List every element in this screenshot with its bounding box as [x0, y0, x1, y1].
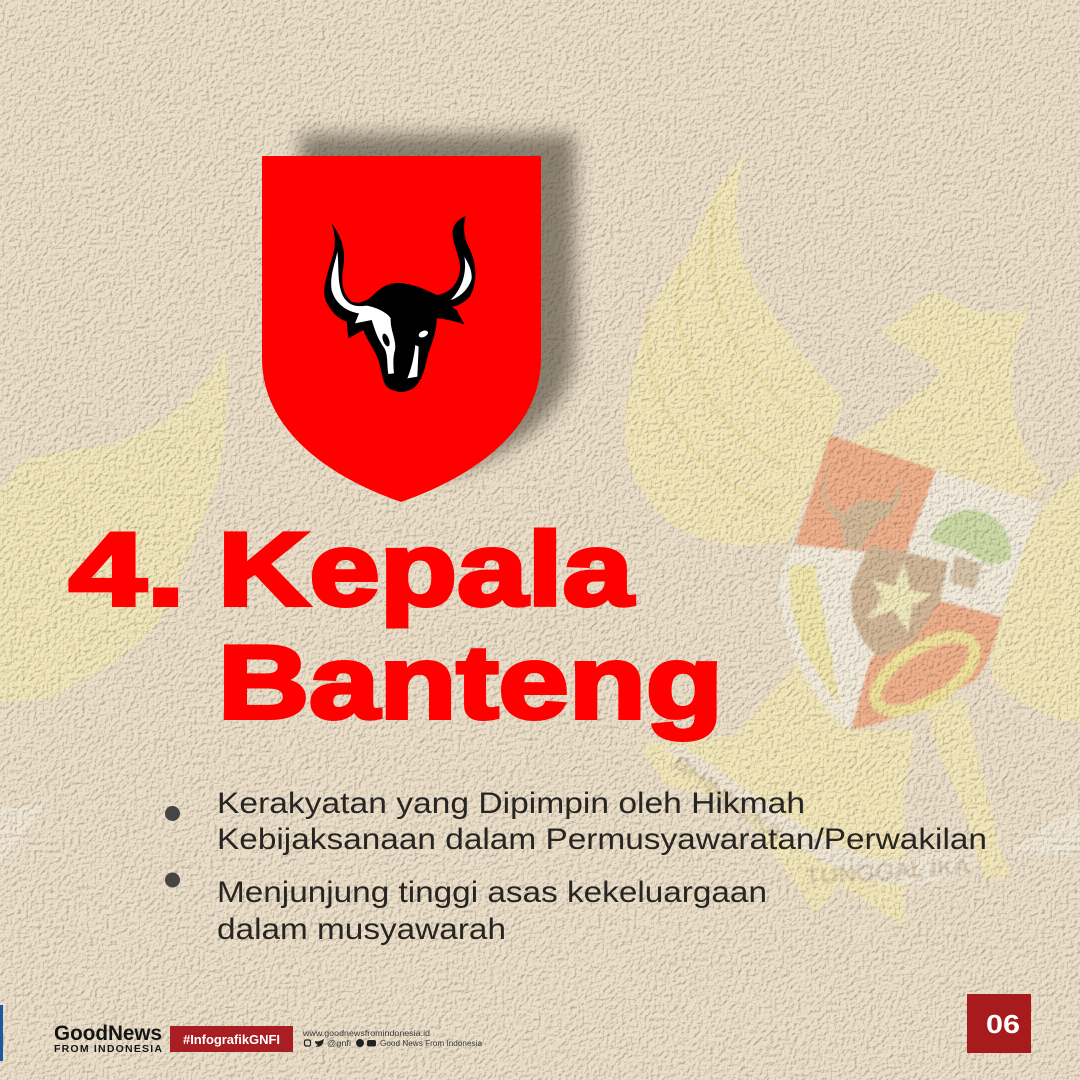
logo GoodNews: GoodNews [54, 1022, 162, 1045]
page name: Good News From Indonesia [380, 1038, 482, 1048]
hashtag badge [170, 1026, 293, 1052]
icon: twitter [315, 1039, 324, 1047]
red quarter top left [795, 435, 936, 555]
footer logo [54, 1022, 162, 1055]
logo subtitle: FROM INDONESIA [54, 1043, 162, 1055]
garuda motto ribbon [664, 745, 978, 884]
garuda tail [640, 660, 915, 927]
title [69, 512, 723, 741]
feather line 1 [711, 200, 800, 420]
bull head black silhouette [324, 216, 475, 392]
shield on garuda [780, 435, 1040, 730]
padi and kapas branch [789, 565, 840, 705]
ribbon end right [1010, 808, 1080, 854]
background emblem: garuda right [625, 153, 1080, 927]
centre brown shield [851, 545, 948, 658]
yellow oval on red quarter [864, 622, 986, 726]
feather line 2 [678, 262, 790, 470]
icon: instagram [304, 1040, 310, 1046]
bullet 2 text line 2: dalam musyawarah [217, 913, 506, 946]
red quarter bottom right [851, 600, 1002, 730]
right horn highlight [451, 257, 472, 300]
bullet 1 text line 2: Kebijaksanaan dalam Permusyawaratan/Perwakilan [217, 823, 987, 856]
centre star [866, 562, 932, 632]
faint bull head [823, 470, 902, 550]
bull eye right [418, 329, 429, 339]
icon: bull head [324, 216, 475, 392]
handle: @gnfi [327, 1038, 351, 1048]
title line 1: Kepala [218, 512, 634, 628]
website: www.goodnewsfromindonesia.id [302, 1028, 430, 1038]
bull nose highlight [407, 345, 419, 378]
title line 2: Banteng [218, 625, 723, 741]
bullet 1 text line 1: Kerakyatan yang Dipimpin oleh Hikmah [217, 787, 805, 820]
bullet 2 text line 1: Menjunjung tinggi asas kekeluargaan [217, 876, 767, 909]
bullet 2 [165, 872, 180, 888]
left edge accent [0, 1005, 3, 1061]
shield shadow [300, 134, 575, 478]
tree trunk [950, 555, 982, 590]
footer social links [302, 1028, 482, 1048]
page number text: 06 [986, 1009, 1020, 1039]
banyan tree [930, 510, 1011, 565]
motto text end: TUNGGAL IKA [804, 853, 972, 890]
bull head white highlight [331, 252, 395, 374]
page number [967, 994, 1031, 1053]
garuda right wing [992, 470, 1080, 722]
icon: youtube [367, 1040, 376, 1046]
garuda head and neck [850, 290, 1050, 520]
badge text: #InfografikGNFI [183, 1032, 280, 1047]
bull eye left [381, 333, 391, 347]
garuda right leg [925, 700, 1012, 880]
bullet list [165, 787, 987, 946]
feather line 3 [647, 300, 780, 510]
red shield [262, 156, 541, 502]
garuda wing [625, 153, 845, 546]
badge background [170, 1026, 293, 1052]
page number box [967, 994, 1031, 1053]
background emblem: garuda left wing [0, 345, 228, 703]
shield white quarters [780, 470, 1040, 730]
background ribbon left [0, 805, 45, 862]
title number: 4. [69, 512, 185, 628]
garuda wing feathers [647, 200, 800, 510]
motto text start: BHINNEKA [669, 752, 787, 846]
bullet 1 [165, 806, 180, 821]
icon: facebook [356, 1039, 364, 1047]
